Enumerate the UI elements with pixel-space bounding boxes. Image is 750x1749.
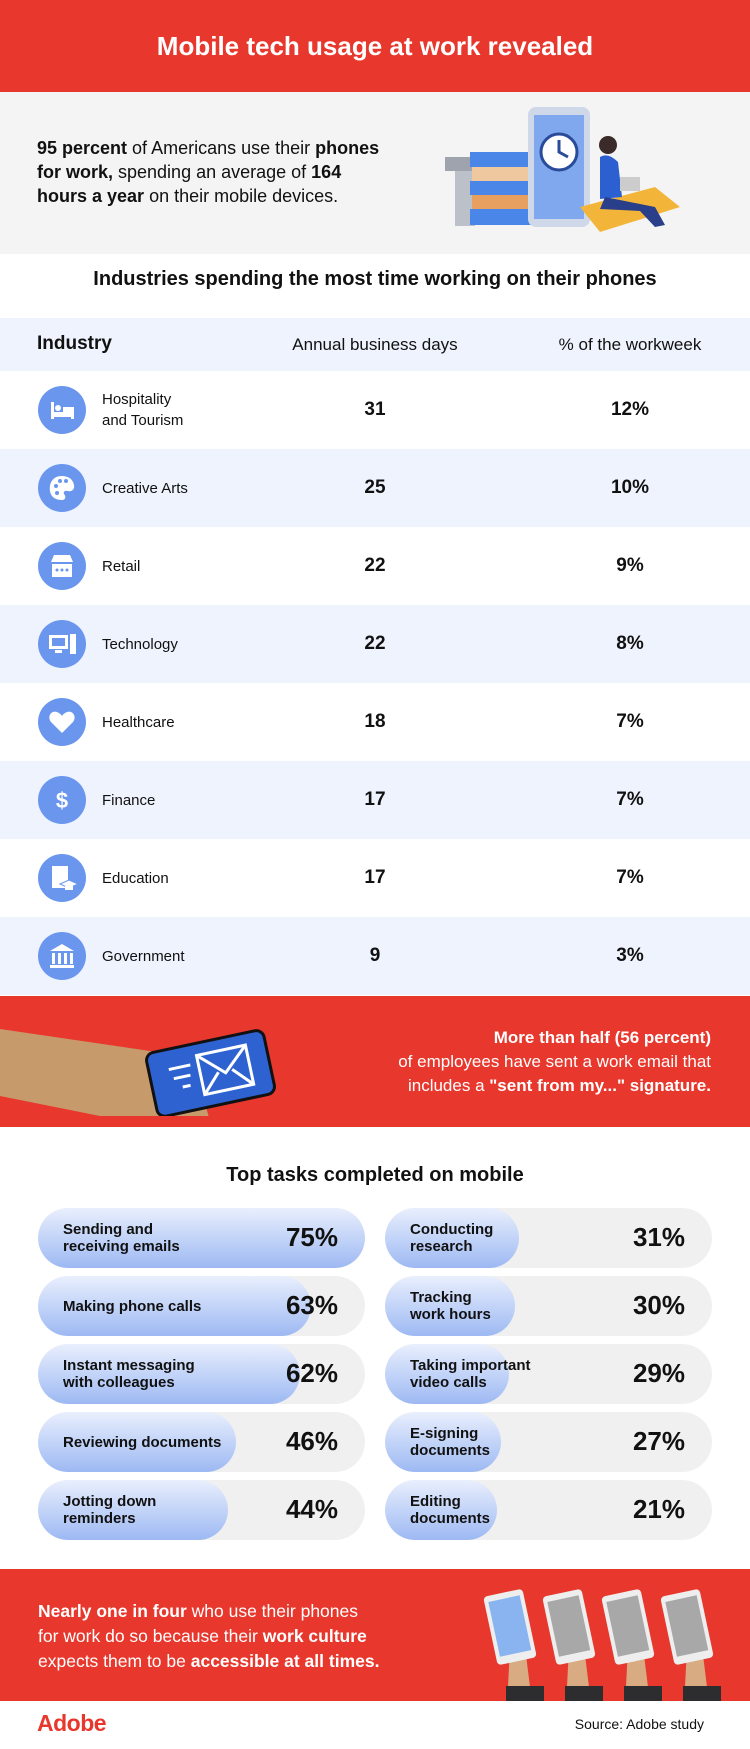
task: research: Conducting (410, 1221, 493, 1238)
email stat text: of employees have sent a work email that (398, 1052, 711, 1071)
row: creative arts: 10% (611, 477, 649, 498)
row: retail (38, 542, 644, 590)
row: government: Government (102, 948, 185, 964)
row: hospitality: 12% (611, 399, 649, 420)
culture text: Nearly one in four who use their phones (38, 1601, 358, 1621)
row: retail: 9% (616, 555, 644, 576)
task: e-signing: documents (410, 1442, 490, 1459)
culture text: expects them to be accessible at all times. (38, 1651, 379, 1671)
table header (0, 318, 750, 371)
illustration: hand holding phone with email (0, 1029, 276, 1116)
tasks chart (38, 1208, 712, 1540)
footer logo: Adobe (37, 1710, 106, 1736)
heading: industries: Industries spending the most time working on their phones (93, 268, 657, 290)
task: instant messaging: 62% (286, 1358, 338, 1388)
row: technology: Technology (102, 636, 178, 652)
task: video calls (385, 1344, 712, 1404)
task: editing: Editing (410, 1493, 461, 1510)
row: education: Education (102, 870, 169, 886)
task: video calls: video calls (410, 1374, 487, 1391)
task: emails: Sending and (63, 1221, 153, 1238)
culture text (38, 1601, 379, 1671)
row: government: 9 (370, 945, 380, 966)
task: emails: receiving emails (63, 1238, 180, 1255)
email stat text: More than half (56 percent) (494, 1028, 711, 1047)
intro text: 95 percent of Americans use their phones for work, spending an average of 164 hours a year on their mobile devices. (37, 138, 379, 206)
row: education (38, 854, 644, 902)
email stat text: includes a "sent from my..." signature. (408, 1076, 711, 1095)
task: phone calls: Making phone calls (63, 1298, 201, 1314)
task: editing: documents (410, 1510, 490, 1527)
task: reviewing documents: 46% (286, 1426, 338, 1456)
row: education: 17 (364, 867, 386, 888)
task: reviewing documents: Reviewing documents (63, 1434, 221, 1450)
task: reminders (38, 1480, 365, 1540)
source: Source: Adobe study (575, 1716, 704, 1732)
table header: Annual business days (292, 335, 458, 354)
task: video calls: Taking important (410, 1357, 531, 1374)
task: emails: 75% (286, 1222, 338, 1252)
task: e-signing: 27% (633, 1426, 685, 1456)
title bar: Mobile tech usage at work revealed (157, 31, 593, 61)
task: tracking hours (385, 1276, 712, 1336)
task: instant messaging (38, 1344, 365, 1404)
task: reminders: reminders (63, 1510, 136, 1527)
table header: Industry (37, 333, 112, 354)
red banner: email stat (0, 996, 750, 1127)
row: finance (0, 761, 750, 839)
task: reminders: Jotting down (63, 1493, 156, 1510)
row: finance: 17 (364, 789, 386, 810)
row: hospitality: Hospitality (102, 391, 171, 408)
row: healthcare (38, 698, 644, 746)
task: instant messaging: Instant messaging (63, 1357, 195, 1374)
task: research (385, 1208, 712, 1268)
row: hospitality: 31 (364, 399, 386, 420)
row: education: 7% (616, 867, 644, 888)
red banner: work culture (0, 1569, 750, 1701)
row: creative arts: 25 (364, 477, 386, 498)
task: tracking hours: 30% (633, 1290, 685, 1320)
row: retail: 22 (364, 555, 386, 576)
row: hospitality: and Tourism (102, 412, 183, 429)
title bar (0, 0, 750, 92)
task: reminders: 44% (286, 1494, 338, 1524)
row: technology: 22 (364, 633, 386, 654)
row: technology (0, 605, 750, 683)
task: editing (385, 1480, 712, 1540)
task: e-signing (385, 1412, 712, 1472)
task: research: 31% (633, 1222, 685, 1252)
row: healthcare: Healthcare (102, 714, 175, 730)
row: creative arts: Creative Arts (102, 480, 188, 496)
row: finance: Finance (102, 792, 155, 808)
email stat text (398, 1028, 711, 1095)
task: tracking hours: Tracking (410, 1289, 472, 1306)
row: government: 3% (616, 945, 644, 966)
task: instant messaging: with colleagues (63, 1374, 175, 1391)
table header: % of the workweek (559, 335, 701, 354)
row: hospitality (38, 386, 649, 434)
illustration: four hands holding phones (484, 1589, 721, 1701)
row: healthcare: 18 (364, 711, 386, 732)
task: emails (38, 1208, 365, 1268)
task: video calls: 29% (633, 1358, 685, 1388)
row: government (0, 917, 750, 995)
task: phone calls: 63% (286, 1290, 338, 1320)
intro panel (0, 92, 750, 254)
task: editing: 21% (633, 1494, 685, 1524)
row: technology: 8% (616, 633, 644, 654)
task: e-signing: E-signing (410, 1425, 478, 1442)
row: healthcare: 7% (616, 711, 644, 732)
task: tracking hours: work hours (410, 1306, 491, 1323)
task: reviewing documents (38, 1412, 365, 1472)
row: finance: 7% (616, 789, 644, 810)
heading: top tasks: Top tasks completed on mobile (226, 1164, 524, 1186)
table (0, 318, 750, 995)
illustration: phone, books, person (445, 107, 680, 232)
row: creative arts (0, 449, 750, 527)
row: finance: $ (56, 788, 68, 813)
culture text: for work do so because their work culture (38, 1626, 367, 1646)
row: retail: Retail (102, 558, 140, 574)
task: phone calls (38, 1276, 365, 1336)
task: research: research (410, 1238, 473, 1255)
